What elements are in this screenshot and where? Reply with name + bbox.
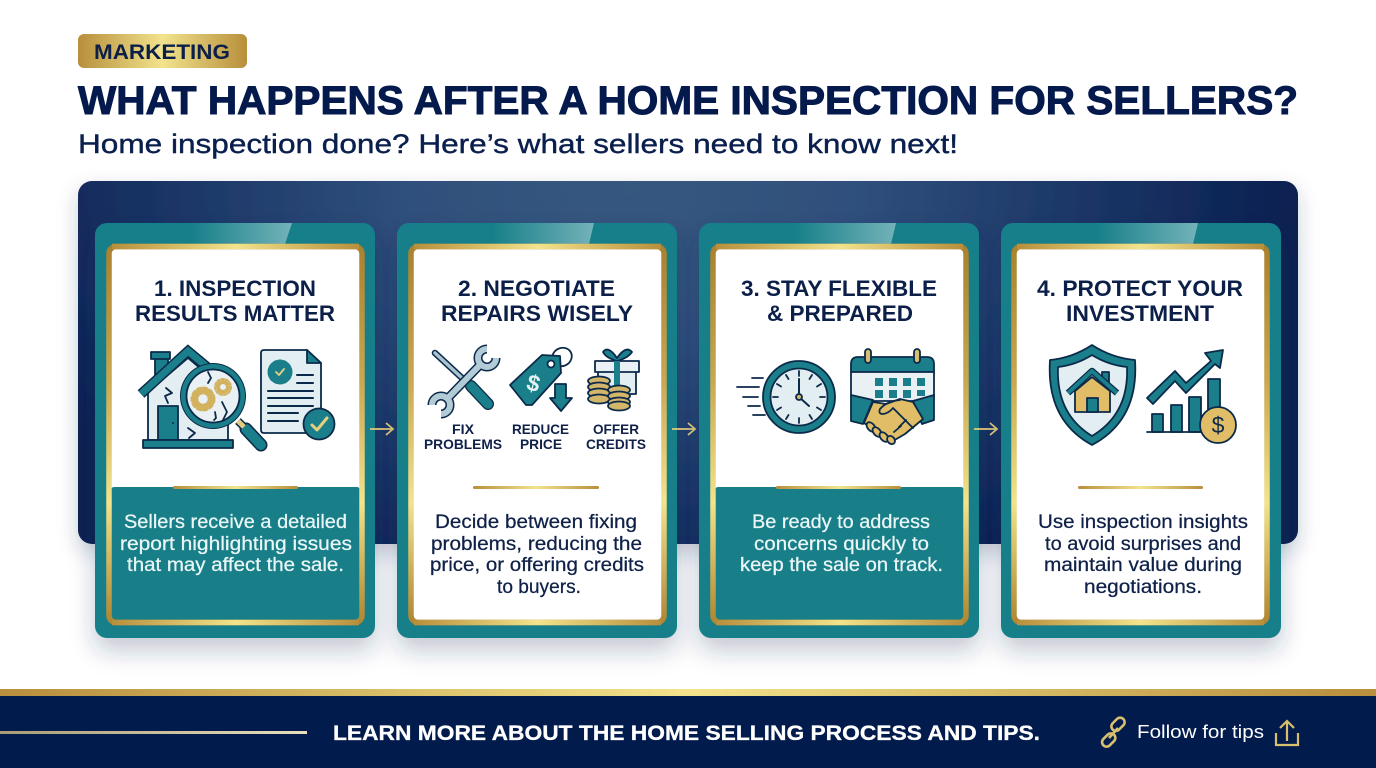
tag: marketing: MARKETING <box>94 41 230 64</box>
icon: link <box>1100 716 1126 748</box>
footer band <box>0 689 1376 768</box>
icon: share <box>1276 721 1298 745</box>
icon labels: repair options: PRICE <box>520 436 562 452</box>
icon labels: repair options: REDUCE <box>512 421 569 437</box>
panel: card 3 <box>699 223 979 638</box>
icon: fix problems tools <box>432 349 496 414</box>
icon: clock with speed lines <box>737 361 835 433</box>
icon: shield with house <box>1050 345 1135 445</box>
body text: card 4 <box>1038 512 1248 598</box>
body text: card 3: Be ready to address <box>752 512 930 533</box>
panel: card 4 <box>1001 223 1281 638</box>
heading: card 2 <box>441 276 633 326</box>
body text: card 1: that may affect the sale. <box>127 555 344 576</box>
arrow: 3 to 4 <box>974 423 997 435</box>
heading: card 1: 1. INSPECTION <box>154 276 316 301</box>
follow for tips label: Follow for tips <box>1137 721 1264 742</box>
body text: card 4: maintain value during <box>1044 555 1242 576</box>
body text: card 4: Use inspection insights <box>1038 512 1248 533</box>
title: WHAT HAPPENS AFTER A HOME INSPECTION FOR SELLERS? <box>78 79 1298 123</box>
body text: card 1 <box>120 512 352 576</box>
tag: marketing <box>78 34 247 68</box>
arrow: 2 to 3 <box>672 423 695 435</box>
body text: card 2 <box>430 512 644 598</box>
icon labels: repair options: CREDITS <box>586 436 646 452</box>
body text: card 4: negotiations. <box>1084 577 1202 598</box>
body text: card 2: price, or offering credits <box>430 555 644 576</box>
panel: card 1 <box>95 223 375 638</box>
icon: growth chart with dollar coin: $ <box>1212 412 1225 438</box>
icon: reduce price tag: $ <box>524 369 543 397</box>
icon labels: repair options <box>424 421 646 452</box>
heading: card 4: 4. PROTECT YOUR <box>1037 276 1243 301</box>
body text: card 2: Decide between fixing <box>435 512 637 533</box>
subtitle: Home inspection done? Here’s what sellers need to know next! <box>78 129 958 159</box>
heading: card 1 <box>135 276 335 326</box>
arrow: 1 to 2 <box>370 423 393 435</box>
heading: card 1: RESULTS MATTER <box>135 301 335 326</box>
body text: card 3: concerns quickly to <box>754 534 929 555</box>
icon labels: repair options: OFFER <box>593 421 639 437</box>
icon: calendar with handshake <box>851 349 934 446</box>
heading: card 3: & PREPARED <box>767 301 913 326</box>
heading: card 4: INVESTMENT <box>1066 301 1214 326</box>
icon labels: repair options: FIX <box>452 421 475 437</box>
body text: card 3: keep the sale on track. <box>740 555 943 576</box>
body text: card 2: to buyers. <box>497 577 581 598</box>
icon: house under magnifier with report <box>141 350 334 448</box>
heading: card 3: 3. STAY FLEXIBLE <box>741 276 937 301</box>
body text: card 1: report highlighting issues <box>120 534 352 555</box>
heading: card 4 <box>1037 276 1243 326</box>
body text: card 4: to avoid surprises and <box>1045 534 1241 555</box>
body text: card 3 <box>740 512 943 576</box>
footer call to action: LEARN MORE ABOUT THE HOME SELLING PROCESS AND TIPS. <box>333 722 1040 745</box>
body text: card 1: Sellers receive a detailed <box>124 512 347 533</box>
heading: card 2: REPAIRS WISELY <box>441 301 633 326</box>
icon: growth chart with dollar coin <box>1147 350 1236 443</box>
icon labels: repair options: PROBLEMS <box>424 436 502 452</box>
icon: reduce price tag <box>510 344 575 411</box>
icon: offer credits gift and coins <box>588 350 639 410</box>
heading: card 2: 2. NEGOTIATE <box>458 276 615 301</box>
panel: card 2 <box>397 223 677 638</box>
heading: card 3 <box>741 276 937 326</box>
background panel <box>78 181 1298 544</box>
body text: card 2: problems, reducing the <box>431 534 642 555</box>
